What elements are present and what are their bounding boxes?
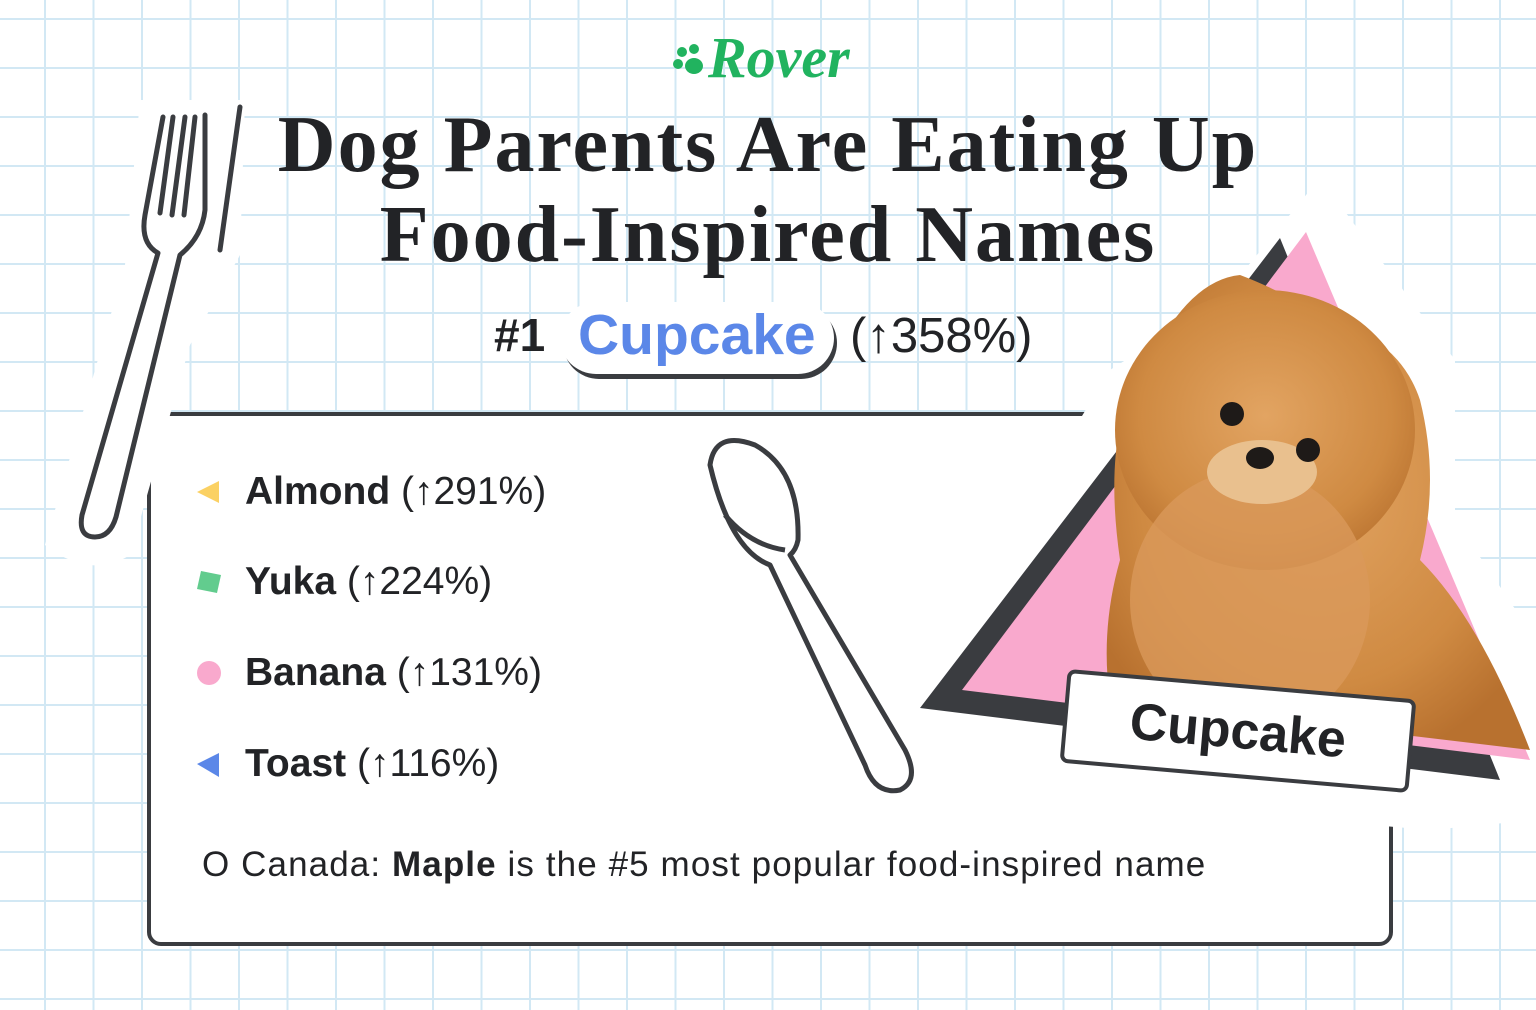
icon: fork sticker <box>45 100 244 566</box>
item: Toast: Toast (↑116%) <box>245 742 499 785</box>
item: Banana: Banana (↑131%) <box>245 651 542 694</box>
panel: main list card <box>147 412 1393 946</box>
item: Almond: Almond (↑291%) <box>245 470 546 513</box>
dog sticker <box>920 194 1536 828</box>
headline: #1 Cupcake: #1 <box>494 309 545 361</box>
sticker white backing <box>900 178 1536 830</box>
headline: #1 Cupcake: (↑358%) <box>850 309 1032 363</box>
list: food names <box>197 470 546 785</box>
icon: spoon sticker <box>708 438 914 794</box>
headline: #1 Cupcake: Cupcake <box>578 303 816 367</box>
headline: #1 Cupcake <box>494 302 1032 379</box>
cloud badge <box>560 302 834 374</box>
title: Dog Parents Are Eating Up <box>278 101 1258 189</box>
logo: Rover: Rover <box>708 25 850 90</box>
footnote: O Canada: Maple is the #5 most popular food-inspired name <box>202 845 1206 884</box>
dog <box>1107 275 1530 750</box>
name label: Cupcake: Cupcake <box>1127 693 1348 769</box>
item: Yuka: Yuka (↑224%) <box>245 560 492 603</box>
title <box>278 101 1258 279</box>
title: Food-Inspired Names <box>380 191 1156 279</box>
name label: Cupcake <box>1060 669 1416 793</box>
